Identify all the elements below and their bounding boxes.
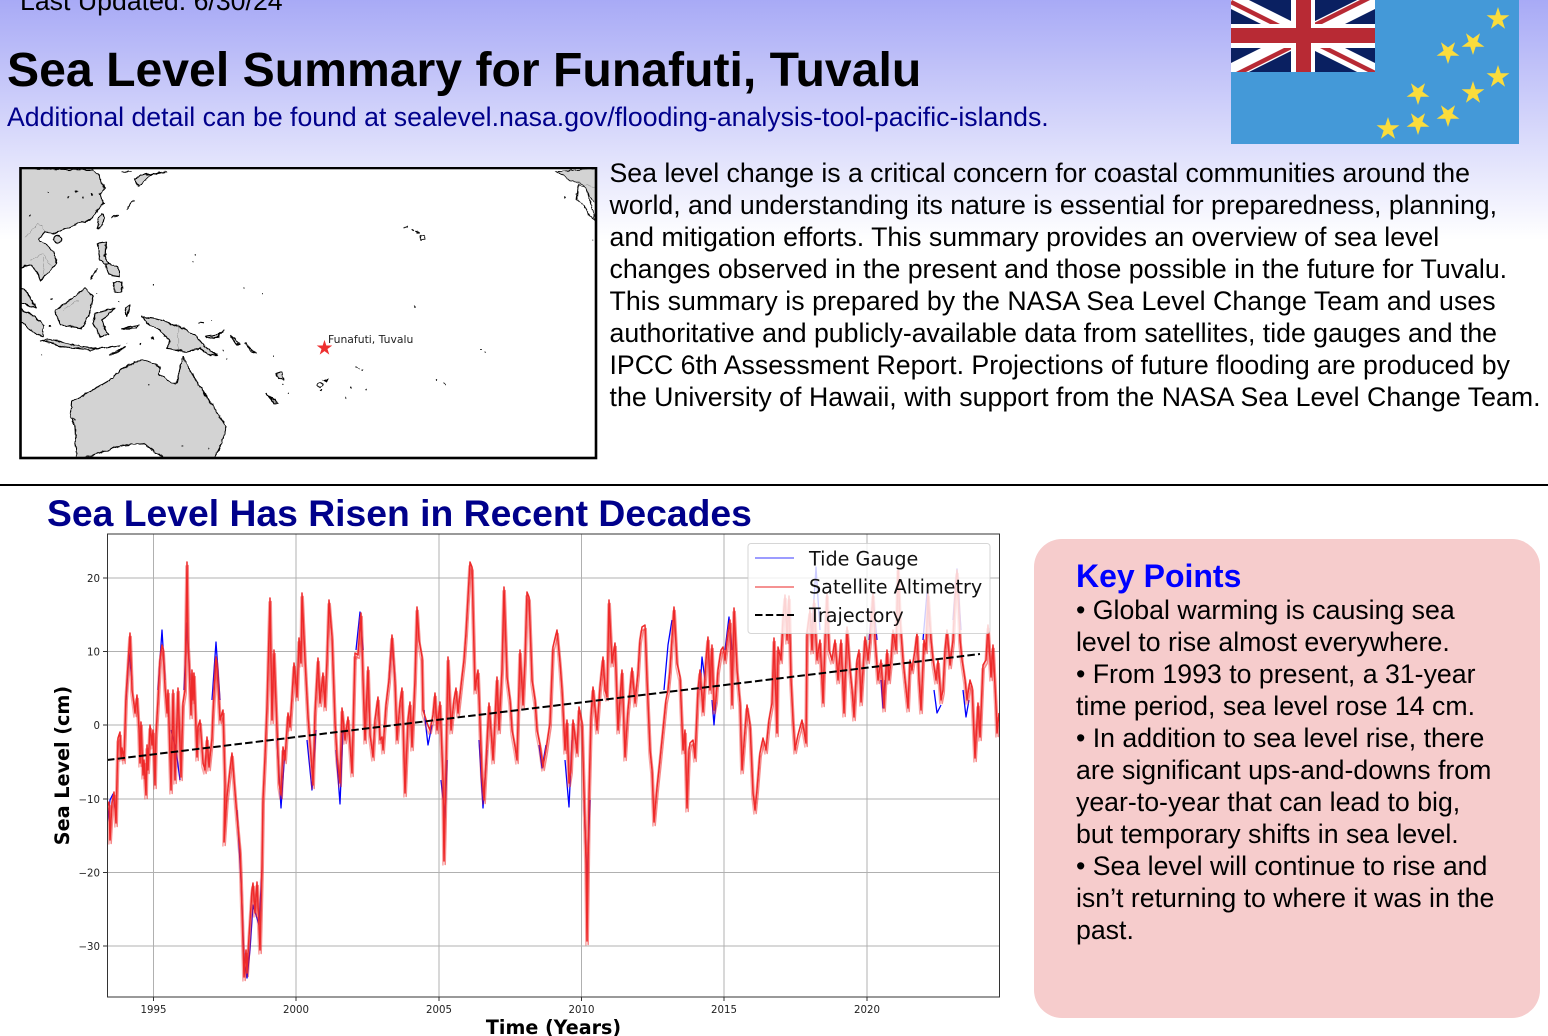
map of the western Pacific with Funafuti marker: Funafuti, Tuvalu — [328, 333, 413, 346]
legend: Trajectory — [808, 604, 904, 627]
key points heading: Key Points — [1076, 558, 1241, 594]
y axis tick labels: −10 — [78, 795, 100, 806]
key points list: past. — [1076, 915, 1134, 945]
subtitle with link: Additional detail can be found at sealevel.nasa.gov/flooding-analysis-tool-pacific-islands. — [7, 102, 1049, 132]
intro paragraph: world, and understanding its nature is essential for preparedness, planning, — [610, 190, 1497, 220]
y axis tick labels: −20 — [78, 868, 100, 880]
x axis tick labels: 1995 — [141, 1005, 166, 1016]
plot frame and ticks — [103, 534, 1000, 1001]
tide gauge line — [107, 567, 969, 978]
chart: sea level time series — [51, 534, 1000, 1036]
x axis tick labels: 2000 — [283, 1005, 309, 1016]
legend: Tide Gauge — [808, 548, 918, 570]
x axis tick labels: 2010 — [569, 1005, 594, 1016]
key points list: level to rise almost everywhere. — [1076, 627, 1450, 657]
title: Sea Level Summary for Funafuti, Tuvalu — [7, 43, 921, 97]
x axis tick labels: 2020 — [854, 1005, 880, 1016]
section divider — [0, 484, 1548, 486]
y axis label: Sea Level (cm) — [51, 686, 74, 845]
intro paragraph: and mitigation efforts. This summary provides an overview of sea level — [610, 222, 1439, 252]
key points list: are significant ups-and-downs from — [1076, 755, 1491, 785]
y axis tick labels: 10 — [87, 648, 100, 658]
icon: Tuvalu flag — [1231, 0, 1519, 144]
legend — [748, 544, 990, 634]
intro paragraph: authoritative and publicly-available data from satellites, tide gauges and the — [610, 318, 1497, 348]
y axis tick labels: 0 — [94, 721, 100, 732]
trajectory trend line — [107, 654, 980, 760]
panel: key points — [1034, 539, 1540, 1018]
key points list: • Global warming is causing sea — [1076, 595, 1455, 625]
key points list: • From 1993 to present, a 31-year — [1076, 659, 1475, 689]
intro paragraph — [610, 158, 1541, 412]
key points list: year-to-year that can lead to big, — [1076, 787, 1460, 817]
intro paragraph: changes observed in the present and those possible in the future for Tuvalu. — [610, 254, 1507, 284]
intro paragraph: IPCC 6th Assessment Report. Projections of future flooding are produced by — [610, 350, 1510, 380]
intro paragraph: the University of Hawaii, with support from the NASA Sea Level Change Team. — [610, 382, 1541, 412]
key points list: time period, sea level rose 14 cm. — [1076, 691, 1475, 721]
y axis tick labels: −30 — [78, 942, 100, 953]
y axis tick labels — [78, 574, 100, 953]
intro paragraph: Sea level change is a critical concern for coastal communities around the — [610, 158, 1470, 188]
satellite altimetry line — [106, 562, 1000, 981]
key points list: isn’t returning to where it was in the — [1076, 883, 1494, 913]
x axis tick labels — [141, 1005, 880, 1016]
key points list: • Sea level will continue to rise and — [1076, 851, 1487, 881]
y axis tick labels: 20 — [87, 574, 100, 585]
key points list: • In addition to sea level rise, there — [1076, 723, 1484, 753]
legend: Satellite Altimetry — [809, 576, 982, 598]
x axis tick labels: 2005 — [426, 1005, 452, 1016]
key points list: but temporary shifts in sea level. — [1076, 819, 1459, 849]
intro paragraph: This summary is prepared by the NASA Sea Level Change Team and uses — [610, 286, 1496, 316]
x axis tick labels: 2015 — [711, 1005, 737, 1016]
map of the western Pacific with Funafuti marker — [19, 167, 598, 460]
header gradient background — [0, 0, 1548, 240]
key points list — [1076, 595, 1494, 945]
section heading: Sea Level Has Risen in Recent Decades — [47, 492, 752, 534]
